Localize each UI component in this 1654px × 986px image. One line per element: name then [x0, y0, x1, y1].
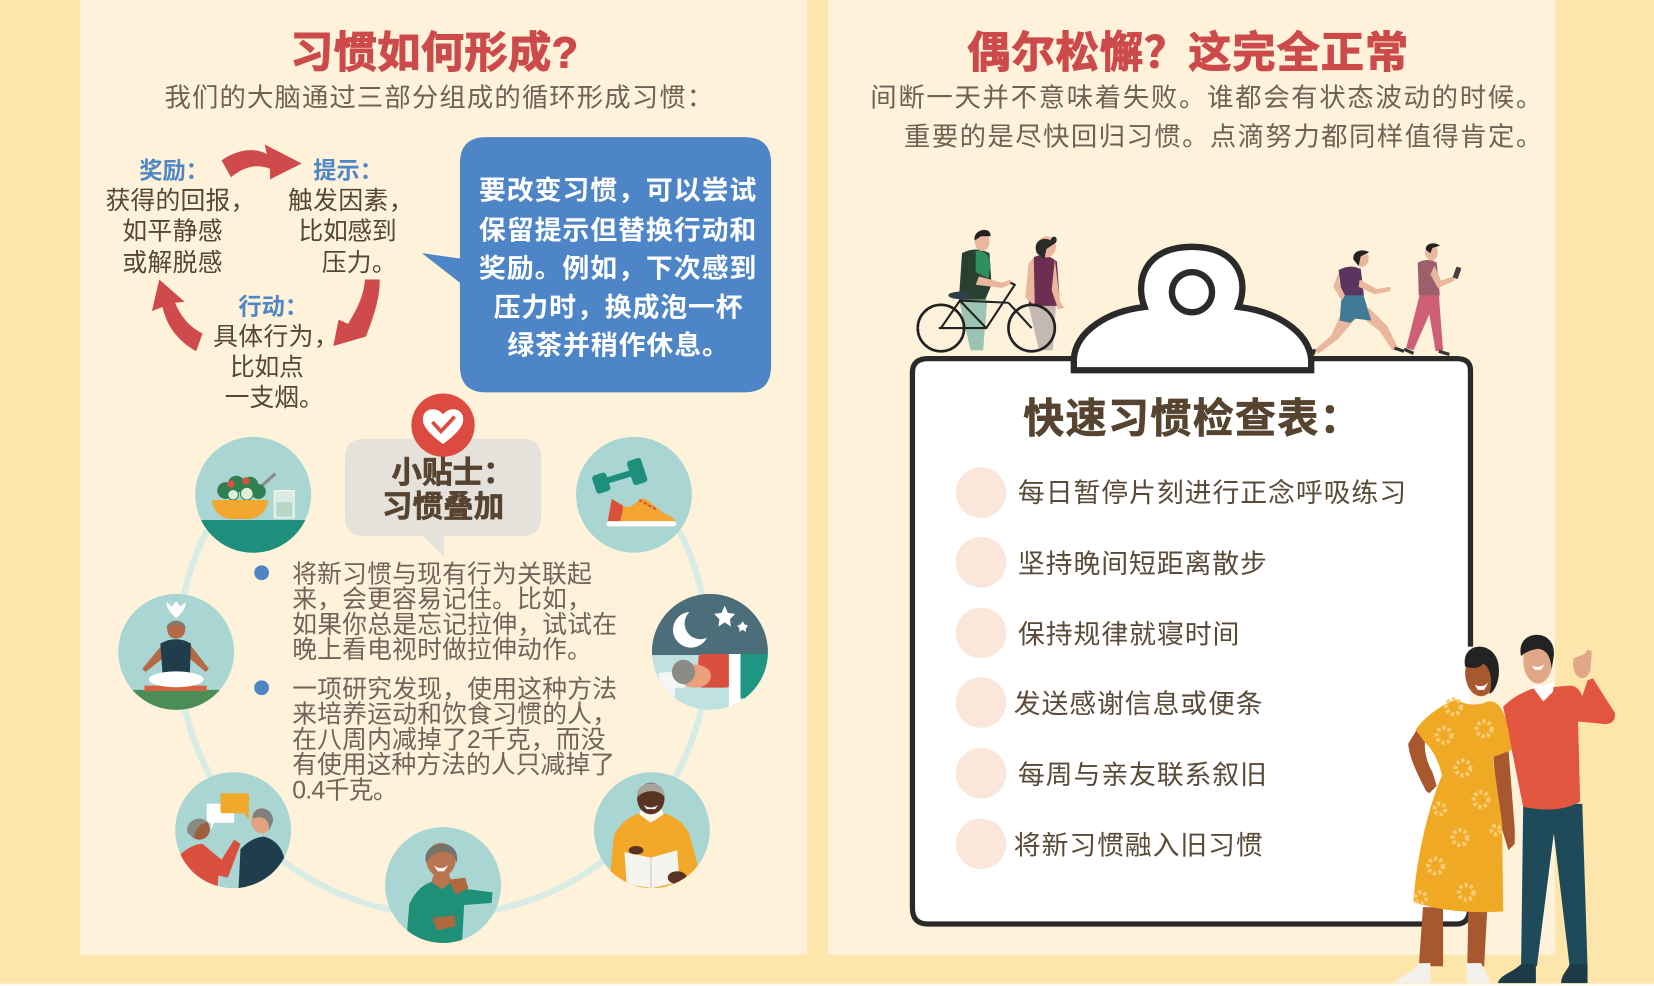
bullet two: 在八周内减掉了2千克，而没	[292, 726, 605, 754]
label: action: 一支烟。	[225, 384, 324, 412]
arrow: cue to action	[333, 280, 380, 346]
item one	[956, 467, 1406, 518]
label: reward: 如平静感	[122, 217, 223, 245]
tip speech bubble: 小贴士：	[391, 456, 514, 490]
callout: change a habit: 要改变习惯，可以尝试	[479, 175, 756, 205]
callout: change a habit: 绿茶并稍作休息。	[507, 330, 729, 360]
icon: conversation	[175, 772, 291, 891]
habit loop diagram	[105, 145, 414, 412]
arrow: reward to cue	[222, 145, 302, 179]
label: cue: 压力。	[322, 249, 397, 277]
item six: 将新习惯融入旧习惯	[1014, 830, 1263, 860]
dress flowers	[1416, 699, 1500, 903]
icon: sleep	[652, 594, 770, 710]
item two: 坚持晚间短距离散步	[1018, 549, 1267, 579]
label: action: 行动：	[238, 293, 308, 319]
item three: 保持规律就寝时间	[1018, 619, 1239, 649]
intro text: 我们的大脑通过三部分组成的循环形成习惯：	[165, 83, 713, 113]
tip bullet list	[254, 560, 617, 805]
item two	[956, 537, 1267, 588]
bullet one: 如果你总是忘记拉伸，试试在	[292, 611, 617, 639]
tip speech bubble: 习惯叠加	[382, 490, 504, 524]
illustration: couple	[1393, 635, 1615, 983]
icon: reading	[594, 772, 710, 888]
item one: 每日暂停片刻进行正念呼吸练习	[1018, 478, 1406, 508]
clipboard clip	[1074, 247, 1311, 370]
woman	[1393, 647, 1515, 983]
clipboard	[912, 247, 1470, 924]
label: action	[213, 293, 339, 412]
bullet one	[254, 560, 617, 664]
checklist heading: 快速习惯检查表：	[1023, 395, 1361, 441]
item three	[956, 608, 1239, 658]
bullet two	[254, 675, 617, 805]
item four	[956, 677, 1263, 728]
panel: occasional slip	[828, 0, 1555, 955]
bullet two: 有使用这种方法的人只减掉了	[292, 751, 615, 779]
arrow: action to reward	[152, 280, 203, 351]
bullet one: 将新习惯与现有行为关联起	[292, 560, 592, 588]
icon: meditation	[118, 594, 234, 711]
callout: change a habit: 保留提示但替换行动和	[479, 215, 756, 245]
intro text: 重要的是尽快回归习惯。点滴努力都同样值得肯定。	[904, 122, 1542, 152]
man	[1498, 635, 1615, 983]
intro text	[870, 83, 1542, 152]
item five	[956, 748, 1267, 799]
ring connecting habit icons	[178, 531, 708, 915]
label: reward: 或解脱感	[122, 249, 223, 277]
label: action: 具体行为，	[213, 323, 339, 351]
intro text: 间断一天并不意味着失败。谁都会有状态波动的时候。	[870, 83, 1542, 113]
illustration: couple with bicycle	[918, 230, 1064, 351]
tip speech bubble	[345, 439, 541, 557]
bullet one: 晚上看电视时做拉伸动作。	[292, 636, 592, 664]
bullet two: 一项研究发现，使用这种方法	[292, 675, 617, 703]
checklist items	[956, 467, 1406, 869]
label: reward: 奖励：	[139, 157, 209, 183]
bullet one: 来，会更容易记住。比如，	[292, 586, 592, 614]
icon: healthy meal	[195, 437, 311, 554]
item four: 发送感谢信息或便条	[1014, 689, 1263, 719]
label: cue: 触发因素，	[288, 187, 414, 215]
label: reward	[105, 157, 255, 277]
bullet two: 0.4千克。	[292, 777, 398, 805]
icon: dumbbell and shoe	[576, 437, 692, 553]
bullet two: 来培养运动和饮食习惯的人，	[292, 701, 617, 729]
callout: change a habit: 压力时，换成泡一杯	[494, 292, 743, 322]
panel: how habits form	[80, 0, 807, 955]
item six	[956, 819, 1263, 869]
heading: how habits form: 习惯如何形成?	[290, 30, 578, 78]
icon: gratitude person	[385, 827, 501, 944]
heading: occasional slip: 偶尔松懈？这完全正常	[967, 30, 1408, 78]
callout: change a habit	[422, 137, 771, 392]
label: action: 比如点	[230, 354, 304, 382]
icon: heart check	[411, 393, 475, 457]
callout: change a habit: 奖励。例如，下次感到	[479, 252, 756, 283]
label: cue: 提示：	[313, 157, 383, 183]
label: cue	[288, 157, 414, 277]
illustration: runner and walker	[1313, 243, 1462, 354]
item five: 每周与亲友联系叙旧	[1018, 760, 1267, 790]
label: cue: 比如感到	[299, 217, 397, 245]
label: reward: 获得的回报，	[105, 187, 255, 215]
